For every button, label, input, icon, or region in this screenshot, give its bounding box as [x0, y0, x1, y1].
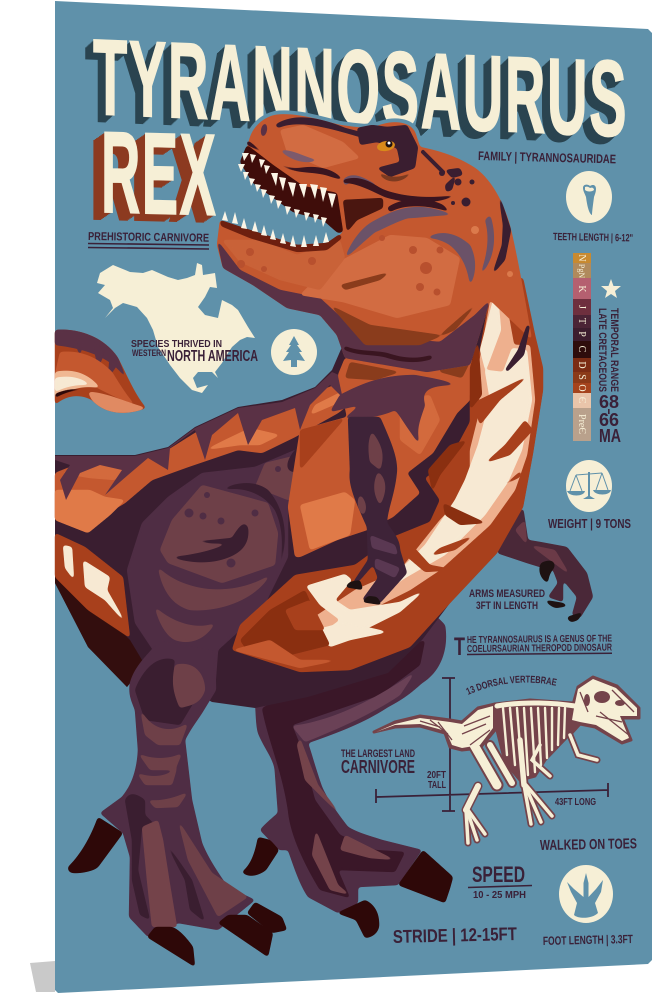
temporal range label: MA [599, 426, 621, 446]
icon: scale [566, 460, 612, 512]
text: arms measured: 3FT IN LENGTH [476, 600, 538, 612]
text: dorsal vertebrae [468, 683, 557, 695]
text: genus description [454, 633, 613, 661]
map caption: WESTERN [132, 348, 166, 359]
title: Tyrannosaurus: TYRANNOSAURUS [93, 16, 628, 159]
belly [232, 278, 543, 672]
skeleton diagram [372, 676, 640, 846]
skeleton [374, 677, 639, 843]
head and neck [217, 114, 532, 372]
text: height: 20FT [427, 770, 446, 781]
text: speed [468, 862, 532, 901]
text: length: 43FT LONG [555, 797, 596, 808]
tail tip [55, 330, 146, 413]
geologic time strip: O [576, 384, 587, 392]
geologic time strip: P [576, 331, 587, 337]
temporal range label: LATE CRETACEOUS [596, 308, 608, 392]
temporal range label: 68 [599, 392, 619, 412]
near arm [345, 417, 407, 605]
side orange patch and neck [288, 358, 480, 557]
geologic time strip: T [576, 318, 587, 324]
title: Rex: REX [101, 107, 217, 240]
teeth [222, 153, 336, 247]
icon: tree [271, 329, 317, 375]
text: largest land carnivore: CARNIVORE [341, 756, 415, 777]
geologic time strip: N [576, 254, 587, 262]
head halo [249, 114, 475, 168]
back orange strip [55, 377, 355, 533]
text: largest land carnivore: THE LARGEST LAND [341, 748, 415, 760]
geologic time strip: K [576, 285, 587, 293]
eye [376, 140, 396, 152]
tail underside [55, 565, 145, 687]
text: genus description: T [454, 633, 465, 661]
icon: tooth [566, 171, 612, 223]
geologic time strip: PreЄ [576, 414, 587, 434]
map caption [131, 338, 258, 365]
text: speed: SPEED [472, 862, 525, 887]
geologic time strip: PgN [577, 264, 586, 278]
geologic time strip: S [576, 374, 587, 380]
text: height [427, 770, 446, 791]
map caption: SPECIES THRIVED IN [131, 338, 222, 350]
map: North America [97, 263, 258, 393]
geologic time strip: Є [576, 397, 587, 404]
skin spots [237, 152, 513, 296]
subtitle: prehistoric carnivore: PREHISTORIC CARNIVORE [88, 231, 209, 245]
geologic time strip: C [576, 346, 587, 353]
skeleton outline layer [374, 677, 639, 780]
mouth [220, 145, 343, 252]
temporal range label [596, 308, 621, 446]
text: speed: 10 - 25 MPH [473, 889, 526, 901]
temporal range label: TEMPORAL RANGE [608, 308, 620, 392]
map caption: NORTH AMERICA [167, 348, 258, 365]
skeleton diagram: 13 DORSAL VERTEBRAE [466, 676, 557, 695]
text: arms measured [469, 588, 545, 612]
head shape [217, 114, 532, 372]
back spines [55, 372, 350, 500]
text: largest land carnivore [341, 748, 415, 777]
temporal range label: 66 [599, 410, 619, 430]
text: stride: STRIDE | 12-15FT [393, 923, 518, 947]
thigh [127, 437, 352, 690]
geologic time strip [573, 253, 591, 441]
body and tail base [55, 280, 543, 708]
icon: star [601, 279, 621, 298]
text: height: TALL [428, 780, 446, 791]
subtitle: prehistoric carnivore [88, 231, 209, 249]
text: arms measured: ARMS MEASURED [469, 588, 545, 600]
icon: footprint [559, 865, 613, 923]
far arm [497, 507, 593, 622]
far leg [242, 610, 453, 938]
measurement axes [376, 678, 608, 811]
tail stripe [55, 533, 130, 638]
geologic time strip: D [576, 361, 587, 369]
skeleton bone layer [376, 679, 637, 748]
dinosaur illustration [55, 114, 593, 967]
near leg [68, 640, 287, 967]
geologic time strip: J [576, 305, 587, 309]
